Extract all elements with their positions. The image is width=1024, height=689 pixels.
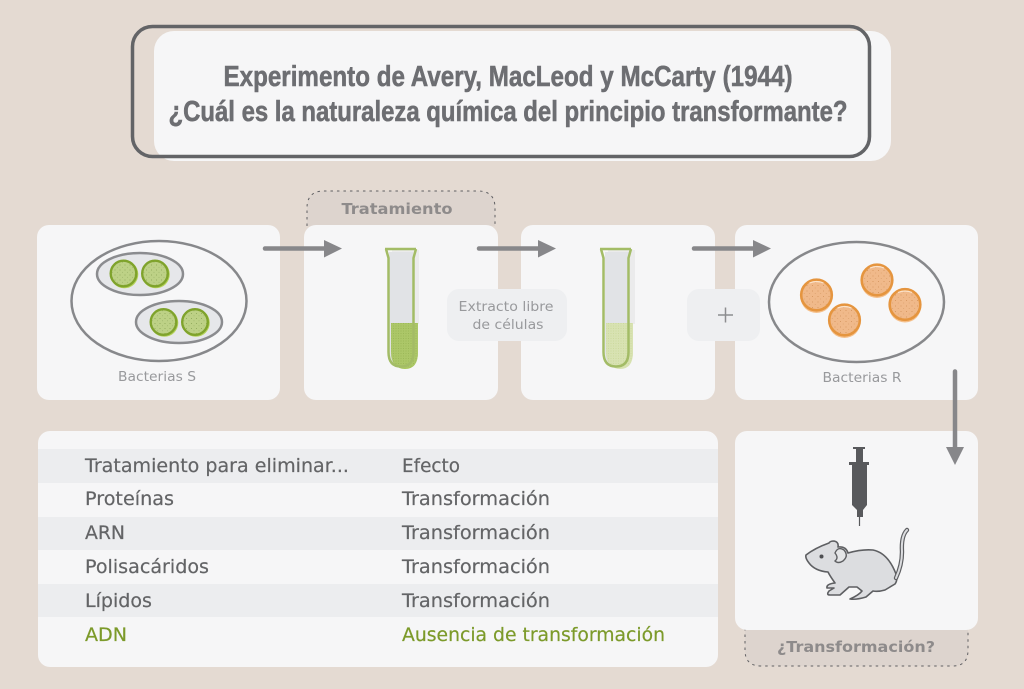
panel: results table bbox=[38, 431, 718, 667]
callout: Extracto libre de células: de células bbox=[472, 318, 544, 333]
row: Lípidos: Transformación bbox=[401, 590, 550, 612]
panel: Bacterias S bbox=[37, 225, 280, 400]
title text: Experimento de Avery, MacLeod y McCarty (1944) bbox=[224, 61, 792, 93]
title text: ¿Cuál es la naturaleza química del principio transformante? bbox=[168, 96, 848, 128]
tab: Tratamiento: Tratamiento bbox=[342, 200, 452, 218]
row: Polisacáridos: Transformación bbox=[401, 556, 550, 578]
table row stripes bbox=[38, 449, 718, 617]
label: Bacterias S: Bacterias S bbox=[118, 370, 196, 385]
row: Lípidos bbox=[85, 590, 550, 612]
row: Polisacáridos: Polisacáridos bbox=[85, 556, 209, 578]
panel: treatment tube bbox=[304, 225, 498, 400]
row: ARN: Transformación bbox=[401, 522, 550, 544]
callout: Extracto libre de células: Extracto libre bbox=[458, 300, 554, 315]
callout: plus bbox=[687, 289, 760, 341]
row: ADN bbox=[85, 624, 665, 646]
tab: ¿Transformación? bbox=[745, 628, 968, 666]
arrow: R to mouse bbox=[946, 372, 964, 465]
icon: plate with R bacteria bbox=[769, 242, 944, 362]
icon: mouse bbox=[806, 530, 907, 599]
tab: ¿Transformación?: ¿Transformación? bbox=[777, 638, 935, 656]
icon: test tube light bbox=[600, 249, 635, 369]
panel: Bacterias R bbox=[735, 225, 978, 400]
row: Proteínas: Transformación bbox=[401, 488, 550, 510]
table header: Efecto bbox=[402, 455, 460, 477]
title text bbox=[168, 61, 848, 128]
arrow: extract to R bbox=[694, 240, 771, 258]
icon: syringe bbox=[849, 447, 869, 526]
arrow: treatment to extract bbox=[479, 240, 556, 258]
tab: Tratamiento bbox=[307, 191, 495, 226]
table header: Tratamiento para eliminar... bbox=[84, 455, 349, 477]
row: Proteínas: Proteínas bbox=[85, 488, 174, 510]
title box bbox=[132, 26, 891, 161]
row: ARN bbox=[85, 522, 550, 544]
row: ADN: ADN bbox=[85, 624, 127, 646]
panel: extract tube bbox=[521, 225, 715, 400]
icon: plate with S bacteria bbox=[72, 241, 246, 361]
arrow: S to treatment bbox=[265, 240, 342, 258]
row: Lípidos: Lípidos bbox=[85, 590, 152, 612]
table header bbox=[84, 455, 460, 477]
row: ADN: Ausencia de transformación bbox=[402, 624, 665, 646]
panel: mouse injection bbox=[735, 431, 978, 630]
label: Bacterias R: Bacterias R bbox=[822, 371, 902, 386]
row: ARN: ARN bbox=[85, 522, 125, 544]
callout: Extracto libre de células bbox=[447, 289, 567, 341]
icon: test tube dark bbox=[385, 249, 419, 369]
row: Polisacáridos bbox=[85, 556, 550, 578]
row: Proteínas bbox=[85, 488, 550, 510]
